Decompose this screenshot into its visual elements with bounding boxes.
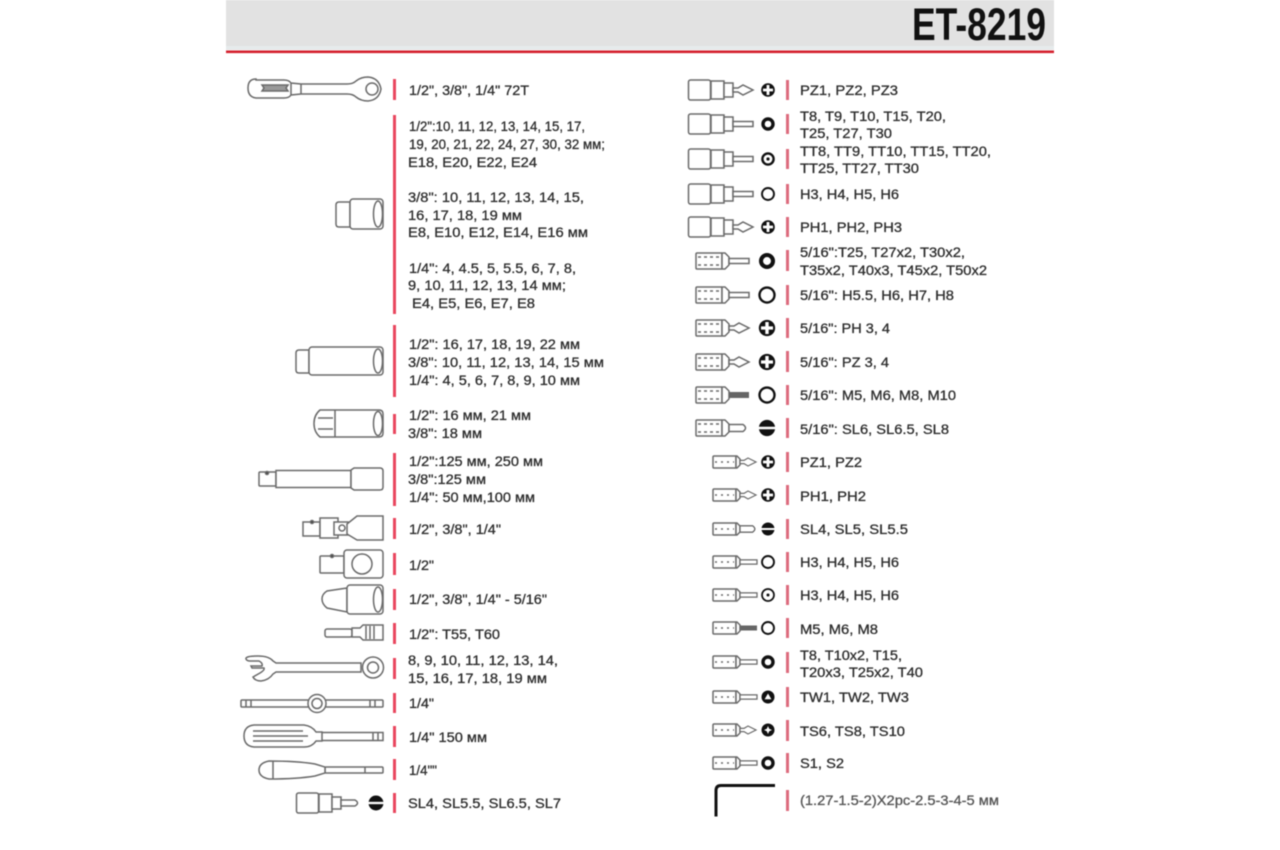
label: 1/4"	[409, 696, 434, 711]
row: TS small bits: TS6, TS8, TS10	[800, 724, 905, 739]
icon: slotted socket bit	[296, 793, 358, 813]
label: E18, E20, E22, E24	[408, 155, 538, 170]
row: T socket bits: T25, T27, T30	[800, 126, 892, 141]
row: TW small bits: TW1, TW2, TW3	[800, 690, 909, 705]
row: spark plug sockets	[314, 408, 531, 441]
row: PH small bits	[713, 485, 866, 505]
row: M small bits	[713, 618, 878, 638]
label: 15, 16, 17, 18, 19 мм	[408, 671, 547, 686]
label: 1/2":125 мм, 250 мм	[409, 454, 543, 469]
label: 8, 9, 10, 11, 12, 13, 14,	[408, 653, 558, 668]
row: adapter	[320, 550, 434, 578]
label: 3/8":125 мм	[408, 472, 486, 487]
label: 1/2"	[409, 558, 434, 573]
label: 1/2", 3/8", 1/4" 72T	[409, 83, 529, 98]
label: 1/2": 16 мм, 21 мм	[409, 408, 531, 423]
icon: L-shaped hex key	[716, 786, 775, 816]
icon: spark plug socket	[314, 410, 383, 437]
row: 5/16 M bits: 5/16": M5, M6, M8, M10	[800, 388, 956, 403]
label	[408, 408, 531, 441]
divider bar	[393, 79, 396, 100]
row: combination wrench	[246, 653, 558, 686]
row: torx socket	[325, 623, 500, 644]
row: H socket bits	[688, 184, 899, 204]
divider bar	[393, 658, 396, 679]
row: T small bits: T8, T10x2, T15,	[800, 648, 902, 663]
row: ratchet	[248, 77, 529, 101]
label: SL4, SL5.5, SL6.5, SL7	[408, 796, 561, 811]
row: 5/16 T bits	[696, 245, 987, 278]
label: E4, E5, E6, E7, E8	[412, 296, 535, 311]
divider bar	[393, 453, 396, 506]
row: deep sockets	[296, 325, 604, 397]
panel: left column tools	[241, 77, 605, 813]
row: TW small bits	[713, 687, 909, 707]
label: 1/2": T55, T60	[409, 627, 500, 642]
label: 9, 10, 11, 12, 13, 14 мм;	[408, 278, 566, 293]
label: (1.27-1.5-2)X2pc-2.5-3-4-5 мм	[800, 793, 999, 808]
divider bar	[393, 115, 396, 314]
divider bar	[393, 589, 396, 610]
label	[408, 653, 558, 686]
label: 16, 17, 18, 19 мм	[408, 208, 522, 223]
label: 1/4": 4, 5, 6, 7, 8, 9, 10 мм	[409, 373, 580, 388]
label: 3/8": 10, 11, 12, 13, 14, 15 мм	[408, 355, 604, 370]
divider bar	[393, 726, 396, 747]
row: H tamper small bits: H3, H4, H5, H6	[800, 588, 899, 603]
row: 5/16 T bits: 5/16":T25, T27x2, T30x2,	[800, 245, 965, 260]
divider bar	[393, 414, 396, 434]
row: PZ small bits	[713, 452, 862, 472]
icon: combination wrench	[246, 656, 384, 681]
row: bit adapter	[322, 585, 547, 614]
divider bar	[393, 518, 396, 539]
row: standard sockets	[336, 115, 605, 314]
label	[408, 337, 604, 388]
row: 5/16 H bits	[696, 285, 954, 305]
icon: extension bar	[259, 468, 383, 490]
icon: sliding T-handle	[241, 694, 383, 712]
row: universal joint	[303, 516, 501, 540]
row: TS small bits	[713, 720, 905, 741]
label	[408, 454, 543, 505]
row: 5/16 H bits: 5/16": H5.5, H6, H7, H8	[800, 288, 954, 303]
row: PZ small bits: PZ1, PZ2	[800, 455, 862, 470]
row: PZ socket bits: PZ1, PZ2, PZ3	[800, 83, 898, 98]
label: E8, E10, E12, E14, E16 мм	[408, 225, 588, 240]
row: hex keys	[716, 786, 999, 816]
label: 1/4": 4, 4.5, 5, 5.5, 6, 7, 8,	[409, 261, 576, 276]
row: PZ socket bits	[688, 80, 898, 100]
header band	[226, 0, 1054, 53]
row: extension bars	[259, 453, 543, 506]
icon: bit holder driver	[259, 761, 383, 779]
title: ET-8219	[912, 0, 1046, 50]
label: 1/2":10, 11, 12, 13, 14, 15, 17,	[409, 119, 585, 134]
icon: socket	[336, 199, 383, 229]
row: S small bits	[713, 753, 844, 773]
label: 19, 20, 21, 22, 24, 27, 30, 32 мм;	[409, 137, 605, 152]
row: T small bits: T20x3, T25x2, T40	[800, 665, 923, 680]
divider bar	[393, 325, 396, 397]
icon: conical bit adapter	[322, 585, 383, 614]
label: 1/4": 50 мм,100 мм	[409, 490, 535, 505]
row: PH socket bits	[688, 217, 902, 237]
row: H tamper small bits	[713, 585, 899, 605]
label: 3/8": 10, 11, 12, 13, 14, 15,	[408, 190, 584, 205]
row: TT socket bits: TT25, TT27, TT30	[800, 161, 919, 176]
divider bar	[393, 553, 396, 575]
icon: square adapter	[320, 550, 383, 578]
row: 5/16 PZ bits	[696, 351, 890, 372]
row: slotted socket bits	[296, 793, 561, 813]
row: 5/16 PH bits	[696, 318, 891, 338]
row: 5/16 SL bits: 5/16": SL6, SL6.5, SL8	[800, 422, 949, 437]
row: 5/16 M bits	[696, 385, 956, 405]
row: T-handle	[241, 693, 434, 713]
label: 3/8": 18 мм	[408, 426, 482, 441]
row: T socket bits	[688, 109, 946, 141]
row: H small bits: H3, H4, H5, H6	[800, 555, 899, 570]
row: screwdriver handle	[244, 725, 487, 747]
row: 5/16 SL bits	[696, 418, 949, 438]
icon: deep socket	[296, 347, 383, 375]
icon: universal joint	[303, 516, 383, 540]
divider bar	[786, 790, 789, 811]
row: H small bits	[713, 552, 899, 572]
row: TT socket bits	[688, 144, 991, 176]
divider bar	[393, 693, 396, 713]
divider bar	[393, 793, 396, 813]
row: TT socket bits: TT8, TT9, TT10, TT15, TT20,	[800, 144, 991, 159]
label: 1/4" 150 мм	[409, 730, 487, 745]
row: 5/16 PZ bits: 5/16": PZ 3, 4	[800, 355, 890, 370]
divider bar	[393, 759, 396, 780]
label: 1/2", 3/8", 1/4" - 5/16"	[409, 592, 547, 607]
label	[408, 119, 605, 311]
label: 1/4""	[409, 763, 437, 778]
row: bit holder driver	[259, 759, 437, 780]
icon: slot symbol	[368, 796, 384, 810]
icon: screwdriver handle	[244, 725, 383, 747]
row: SL small bits: SL4, SL5, SL5.5	[800, 522, 908, 537]
row: 5/16 PH bits: 5/16": PH 3, 4	[800, 321, 891, 336]
label: 1/2": 16, 17, 18, 19, 22 мм	[409, 337, 580, 352]
row: T socket bits: T8, T9, T10, T15, T20,	[800, 109, 946, 124]
row: H socket bits: H3, H4, H5, H6	[800, 187, 899, 202]
row: SL small bits	[713, 519, 908, 539]
panel: right column bits	[688, 80, 999, 816]
row: M small bits: M5, M6, M8	[800, 622, 878, 637]
label: 1/2", 3/8", 1/4"	[409, 522, 501, 537]
row: 5/16 T bits: T35x2, T40x3, T45x2, T50x2	[800, 263, 987, 278]
divider bar	[393, 623, 396, 644]
icon: torx bit socket	[325, 625, 383, 640]
row: PH small bits: PH1, PH2	[800, 489, 866, 504]
row: PH socket bits: PH1, PH2, PH3	[800, 220, 902, 235]
row: S small bits: S1, S2	[800, 756, 844, 771]
icon: ratchet	[248, 77, 381, 101]
row: T small bits	[713, 648, 923, 680]
